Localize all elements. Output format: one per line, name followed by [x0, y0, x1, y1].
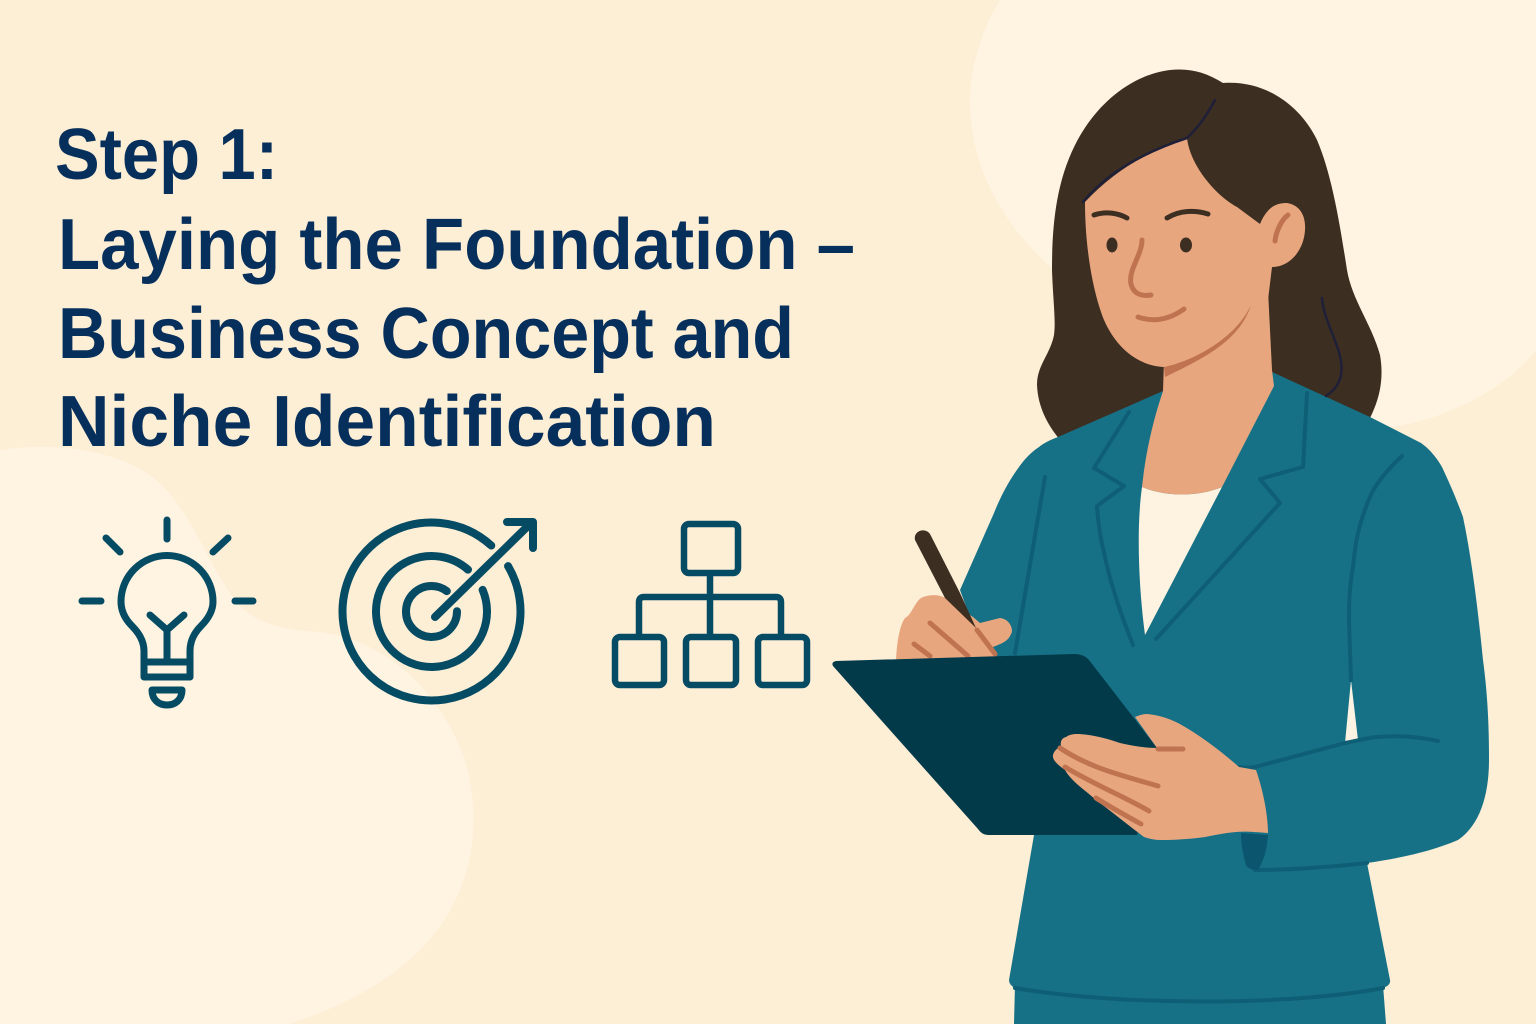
- jaw shadow: [1164, 305, 1251, 377]
- title: [55, 115, 855, 462]
- background blob: top right: [970, 0, 1536, 428]
- icon: org chart: [615, 524, 807, 685]
- skirt: [1014, 985, 1386, 1024]
- shirt: [1139, 487, 1222, 635]
- hair: [1037, 70, 1382, 440]
- title: Niche Identification: [58, 382, 716, 462]
- icon: light bulb: [82, 520, 253, 705]
- title: Business Concept and: [58, 294, 794, 374]
- person illustration: [832, 70, 1489, 1024]
- jacket: [960, 372, 1489, 1002]
- left hand holding pen: [896, 595, 1012, 660]
- icon: target with arrow: [310, 490, 553, 733]
- neck: [1142, 260, 1274, 494]
- face and ear: [1085, 138, 1305, 368]
- title: Laying the Foundation –: [58, 205, 855, 285]
- clipboard: [832, 654, 1157, 835]
- pen: [915, 530, 976, 628]
- hair strands: [1083, 100, 1342, 396]
- background blob: bottom left: [0, 447, 474, 1024]
- facial features: [1094, 211, 1288, 320]
- jacket seams: [1015, 393, 1438, 1002]
- sliver between arm and body: [1345, 680, 1358, 743]
- title: Step 1:: [55, 115, 278, 195]
- cuff shadow: [1241, 833, 1268, 870]
- right hand: [1053, 714, 1268, 840]
